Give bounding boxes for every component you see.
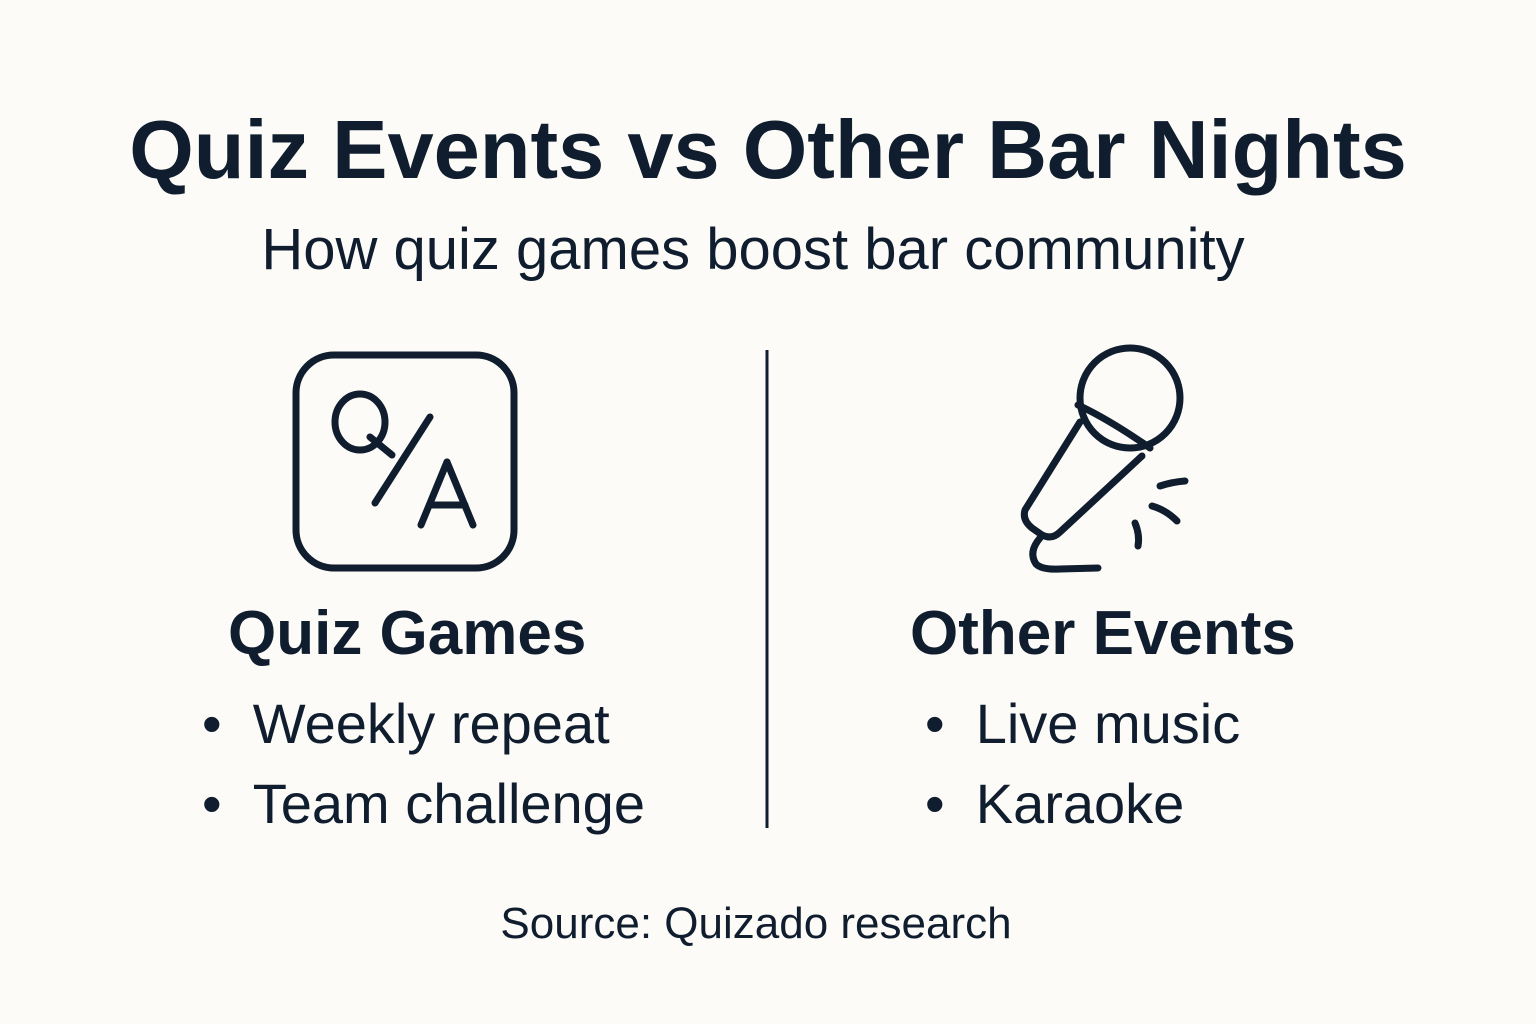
title: Quiz Events vs Other Bar Nights <box>129 103 1407 196</box>
icon: microphone <box>1024 348 1185 569</box>
list: quiz games <box>202 692 645 835</box>
list: other events: • Karaoke <box>925 772 1184 835</box>
list: quiz games: • Weekly repeat <box>202 692 610 755</box>
list: other events <box>925 692 1240 835</box>
list: other events: • Live music <box>925 692 1240 755</box>
heading: Quiz Games: Quiz Games <box>228 599 586 668</box>
icon: Q/A <box>296 355 514 568</box>
source: Source: Quizado research <box>500 899 1012 948</box>
divider <box>766 350 768 828</box>
list: quiz games: • Team challenge <box>202 772 645 835</box>
heading: Other Events: Other Events <box>910 599 1296 668</box>
subtitle: How quiz games boost bar community <box>261 217 1245 282</box>
